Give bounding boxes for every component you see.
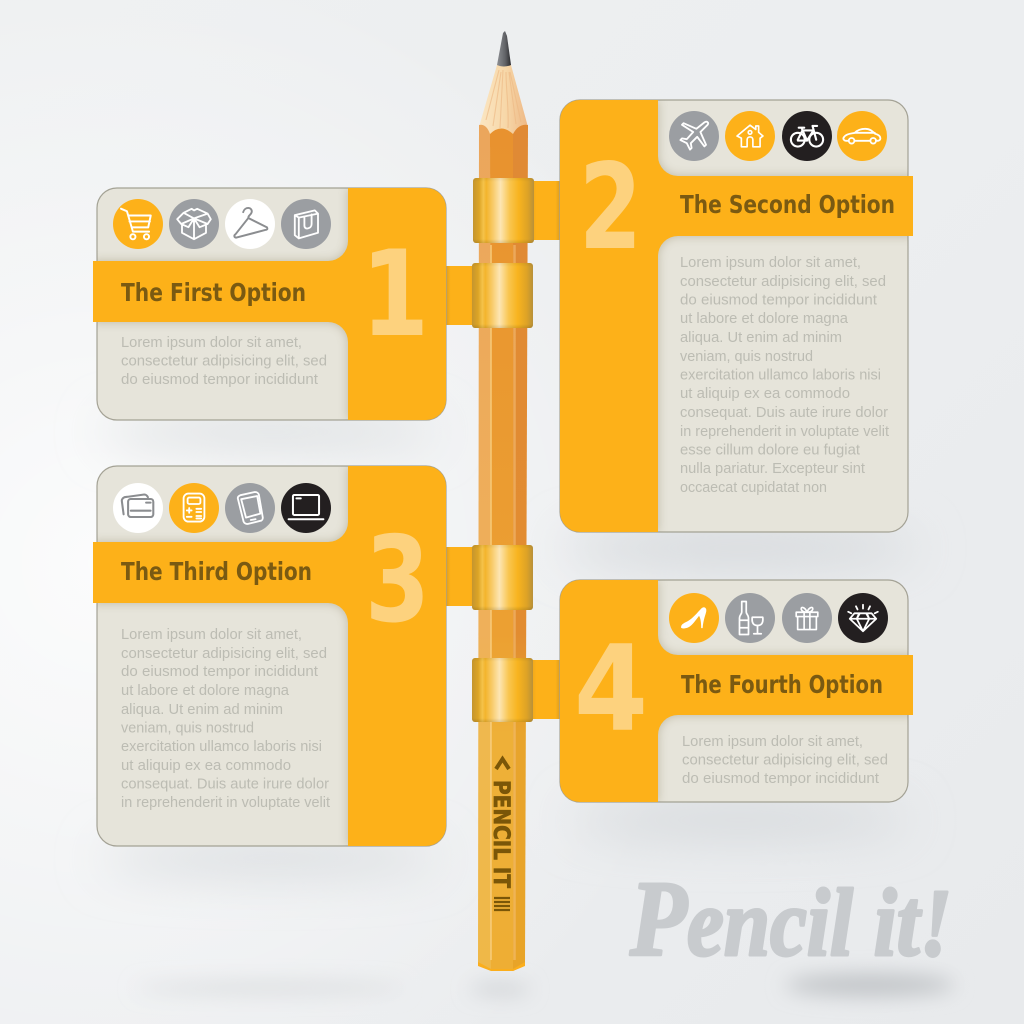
body text: veniam, quis nostrud [121,720,254,736]
icon: shopping cart [113,199,163,249]
body text [121,335,327,388]
pencil [472,31,534,971]
body text: Lorem ipsum dolor sit amet, [682,734,863,750]
body text: ut labore et dolore magna [680,311,849,327]
icon: gift box [782,593,832,643]
soft background shadows [100,416,955,996]
body text: consequat. Duis aute irure dolor [680,405,888,421]
icon: high heel [669,593,719,643]
body text: do eiusmod tempor incididunt [682,771,879,787]
body text: consectetur adipisicing elit, sed [121,354,327,370]
number 2: 2 [579,139,642,277]
icon: laptop [281,483,331,533]
connector tabs [444,181,562,719]
icon: open box [169,199,219,249]
body text [121,627,330,811]
icon: shopping bag [281,199,331,249]
icon: credit cards [113,483,163,533]
ring 2 [472,263,533,328]
heading: The Fourth Option [681,670,883,699]
body text: ut aliquip ex ea commodo [680,386,850,402]
icon: house [725,111,775,161]
orange ribbon [93,188,446,420]
body text: aliqua. Ut enim ad minim [121,702,283,718]
body text: ut aliquip ex ea commodo [121,758,291,774]
slogan: Pencil it! [629,860,952,979]
body text: do eiusmod tempor incididunt [121,664,318,680]
body text: Lorem ipsum dolor sit amet, [680,255,861,271]
number 4: 4 [574,621,648,759]
number 1: 1 [361,226,429,364]
body text: do eiusmod tempor incididunt [680,292,877,308]
body text: ut labore et dolore magna [121,683,290,699]
panel: second option [560,100,913,532]
body text: esse cillum dolore eu fugiat [680,442,860,458]
ring 1 [473,178,534,243]
panel: first option [93,188,446,420]
ring 4 [472,658,533,722]
orange ribbon [560,580,913,802]
orange ribbon [93,466,446,846]
heading: The Third Option [121,557,312,586]
ring 3 [472,545,533,610]
body text: do eiusmod tempor incididunt [121,372,318,388]
body text: veniam, quis nostrud [680,349,813,365]
body text: exercitation ullamco laboris nisi [680,368,881,384]
body text: Lorem ipsum dolor sit amet, [121,335,302,351]
body text: consectetur adipisicing elit, sed [121,646,327,662]
body text: aliqua. Ut enim ad minim [680,330,842,346]
icon: wine bottle and glass [725,593,775,643]
body text: consectetur adipisicing elit, sed [680,274,886,290]
icon: airplane [669,111,719,161]
icon: calculator [169,483,219,533]
icon: hanger [225,199,275,249]
number 3: 3 [365,512,430,650]
body text: consectetur adipisicing elit, sed [682,752,888,768]
body text: exercitation ullamco laboris nisi [121,739,322,755]
pencil body [478,125,528,971]
panel: third option [93,466,446,846]
body text: in reprehenderit in voluptate velit [680,424,889,440]
body text: nulla pariatur. Excepteur sint [680,461,865,477]
pencil lettering: PENCIL IT [488,780,513,888]
body text: occaecat cupidatat non [680,480,827,496]
heading: The First Option [121,278,306,307]
body text [680,255,889,496]
heading: The Second Option [680,190,895,219]
body text [682,734,888,787]
pencil tip wood [479,65,528,138]
orange ribbon [560,100,913,532]
icon: bicycle [782,111,832,161]
icon: diamond [838,593,888,643]
panel: fourth option [560,580,913,802]
body text: Lorem ipsum dolor sit amet, [121,627,302,643]
pencil lead [497,31,511,66]
body text: consequat. Duis aute irure dolor [121,776,329,792]
icon: smartphone [225,483,275,533]
icon: car [837,111,887,161]
body text: in reprehenderit in voluptate velit [121,795,330,811]
